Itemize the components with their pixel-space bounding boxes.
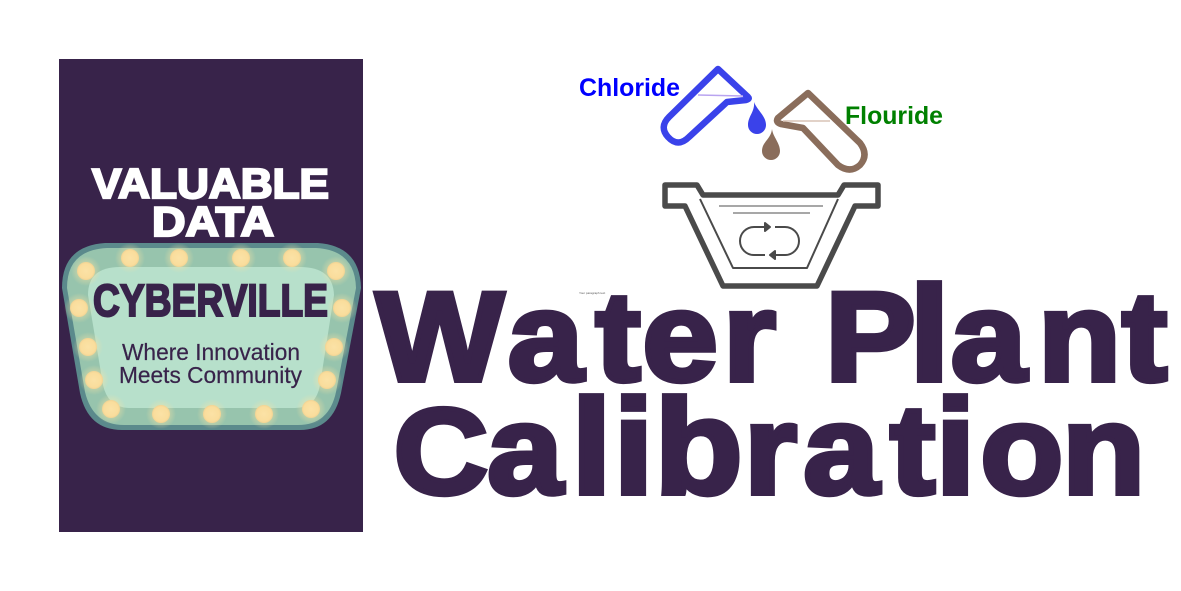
basin inner wall bbox=[700, 199, 838, 268]
title: water plant calibration: o bbox=[980, 379, 1063, 521]
title: water plant calibration: a bbox=[487, 379, 564, 521]
label: chloride: Chloride bbox=[579, 74, 680, 102]
title: water plant calibration: r bbox=[744, 379, 797, 521]
title: water plant calibration: P bbox=[825, 266, 916, 408]
title: water plant calibration: i bbox=[936, 371, 976, 522]
title: water plant calibration: W bbox=[376, 266, 504, 408]
sign name: cyberville: CYBERVILLE bbox=[93, 275, 328, 326]
title: water plant calibration: r bbox=[723, 266, 776, 408]
icon: blue test tube bbox=[664, 69, 749, 142]
heading: valuable data bbox=[92, 160, 329, 245]
icon: recycle arrows bbox=[740, 223, 799, 259]
sign tagline: Where Innovation bbox=[122, 339, 300, 365]
marquee sign bbox=[62, 243, 361, 430]
title: water plant calibration: a bbox=[951, 266, 1027, 408]
label: flouride: Flouride bbox=[845, 102, 943, 130]
title: water plant calibration: e bbox=[642, 266, 718, 408]
title: water plant calibration: b bbox=[655, 371, 743, 522]
icon: mixing basin bbox=[665, 185, 878, 286]
heading: valuable data: VALUABLE bbox=[92, 160, 329, 207]
sign band bbox=[67, 248, 356, 425]
tiny placeholder text: Your paragraph text bbox=[579, 291, 605, 295]
title: water plant calibration: l bbox=[910, 258, 950, 409]
sign tagline: Meets Community bbox=[119, 362, 302, 388]
title: water plant calibration: t bbox=[595, 266, 641, 408]
basin outline bbox=[665, 185, 878, 286]
panel: purple background bbox=[59, 59, 363, 532]
title: water plant calibration bbox=[376, 258, 1167, 522]
title: water plant calibration: n bbox=[1062, 379, 1145, 521]
title: water plant calibration: n bbox=[1038, 266, 1121, 408]
sign bulbs bbox=[64, 243, 357, 429]
sign inner panel bbox=[88, 267, 334, 408]
sign outer frame bbox=[62, 243, 361, 430]
sign tagline bbox=[119, 339, 302, 388]
title: water plant calibration: i bbox=[614, 371, 654, 522]
title: water plant calibration: a bbox=[803, 379, 880, 521]
water lines bbox=[719, 206, 823, 213]
icon: brown drop bbox=[762, 129, 780, 160]
title: water plant calibration: C bbox=[394, 383, 488, 520]
icon: brown test tube bbox=[777, 93, 864, 170]
icon: blue drop bbox=[748, 102, 766, 134]
title: water plant calibration: l bbox=[571, 371, 612, 522]
title: water plant calibration: t bbox=[890, 379, 935, 521]
title: water plant calibration: a bbox=[508, 266, 584, 408]
heading: valuable data: DATA bbox=[152, 198, 274, 245]
title: water plant calibration: t bbox=[1122, 266, 1167, 408]
